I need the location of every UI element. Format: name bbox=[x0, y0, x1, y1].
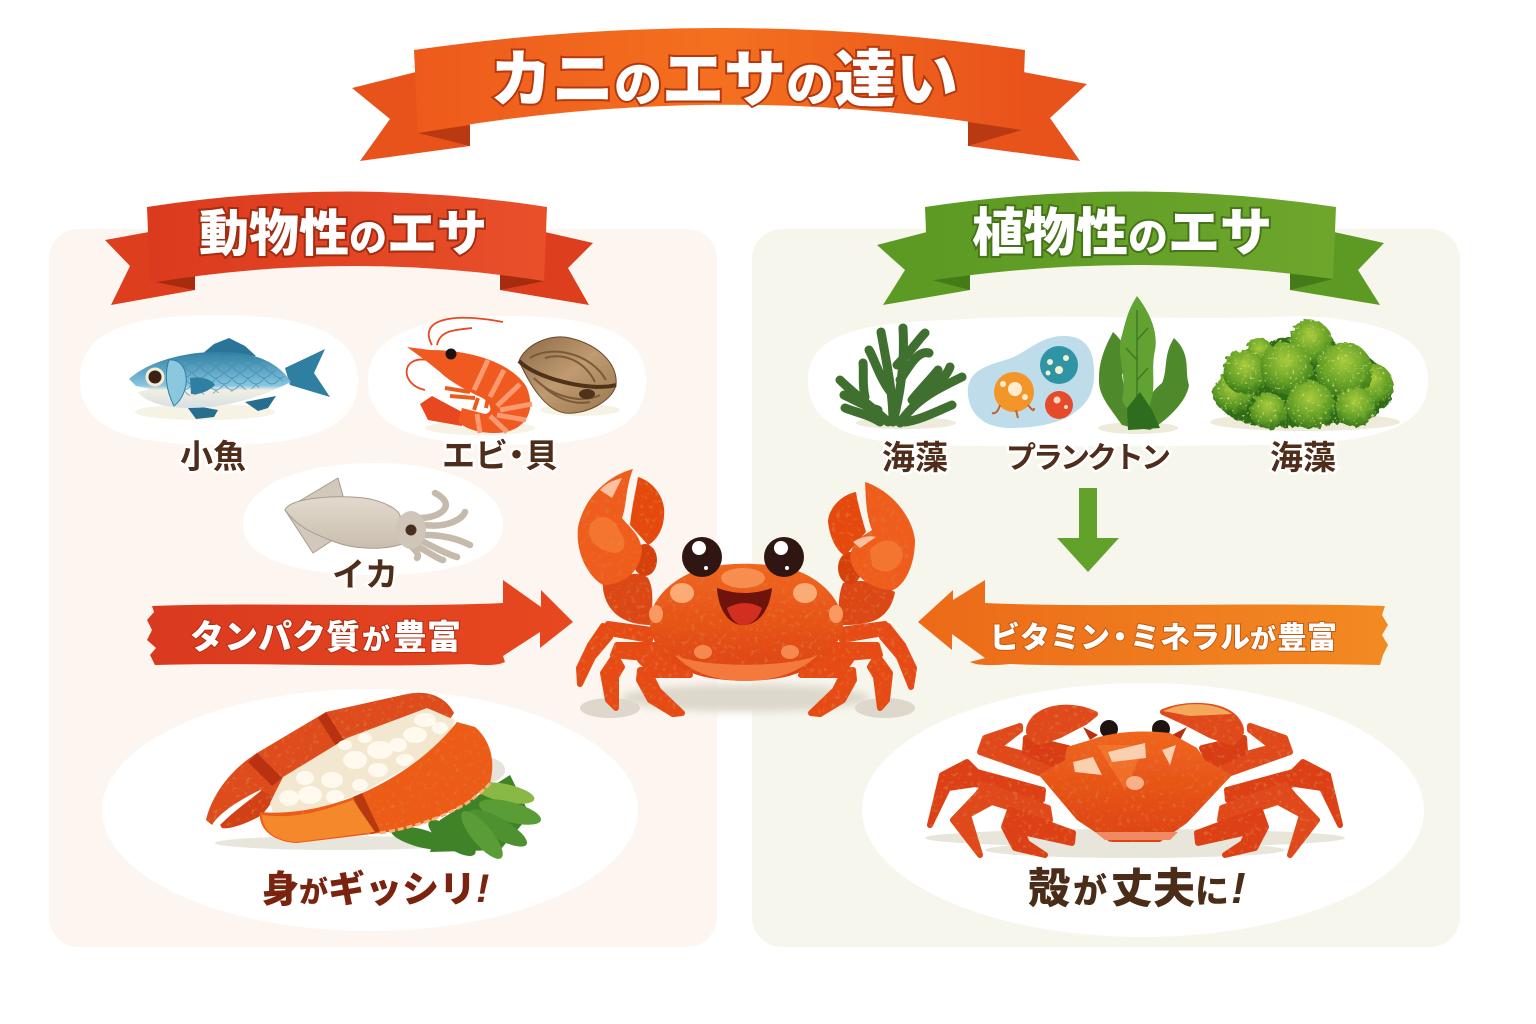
icon: shrimp bbox=[407, 318, 535, 435]
ribbon: plant feed heading bbox=[877, 192, 1384, 305]
sub: left claw bbox=[578, 469, 664, 625]
label: seaweed 2: 海藻 bbox=[1270, 439, 1336, 476]
heading text: plant: 植物性のエサ bbox=[972, 205, 1272, 263]
bubble: meaty claw result bbox=[102, 689, 638, 931]
bubble: small fish bbox=[80, 315, 358, 475]
icon: branching seaweed bbox=[840, 328, 962, 429]
icon: fish bbox=[129, 338, 330, 420]
sub: crab body bbox=[650, 564, 843, 681]
icon: strong crab bbox=[925, 704, 1345, 858]
text: vitamins and minerals rich: ビタミン・ミネラルが豊富 bbox=[990, 621, 1337, 655]
icon: squid bbox=[285, 478, 470, 560]
text: protein rich: タンパク質が豊富 bbox=[190, 619, 461, 657]
label: squid: イカ bbox=[332, 556, 398, 593]
sub: crab eyes bbox=[682, 537, 804, 577]
icon: plankton bbox=[968, 336, 1094, 428]
text: strong shell: 殻が丈夫に! bbox=[1028, 864, 1246, 913]
arrow: protein band bbox=[147, 580, 573, 665]
sub: right claw bbox=[828, 482, 915, 625]
mascot: smiling crab in center bbox=[578, 469, 915, 718]
sub: left legs bbox=[579, 624, 690, 714]
arrow: vitamin band bbox=[918, 580, 1388, 665]
icon: green seaweed clump bbox=[1210, 320, 1400, 431]
sub: right legs bbox=[801, 624, 914, 714]
bubble: shrimp and shellfish bbox=[368, 316, 646, 474]
sub: right legs and claw bbox=[1163, 706, 1340, 855]
ribbon: animal feed heading bbox=[105, 192, 593, 305]
sub: leaves bbox=[389, 775, 543, 864]
arrow: green down arrow bbox=[1057, 488, 1119, 572]
label: plankton: プランクトン bbox=[1006, 442, 1170, 475]
heading text: animal: 動物性のエサ bbox=[199, 206, 487, 262]
bubble: plant foods bbox=[808, 296, 1428, 476]
icon: kelp bbox=[1098, 296, 1189, 434]
title banner bbox=[352, 28, 1087, 161]
label: shrimp and shellfish: エビ・貝 bbox=[442, 437, 558, 474]
sub: crab smile bbox=[717, 588, 772, 625]
bubble: squid bbox=[243, 463, 503, 593]
label: seaweed 1: 海藻 bbox=[882, 439, 948, 476]
text: packed with meat: 身がギッシリ! bbox=[262, 867, 489, 911]
bubble: strong shell result bbox=[862, 683, 1424, 937]
icon: crab claw meat bbox=[206, 693, 543, 864]
sub: shell markings bbox=[589, 478, 903, 681]
panel: animal feed background bbox=[49, 229, 717, 947]
panel: plant feed background bbox=[752, 229, 1460, 947]
sub: left legs and claw bbox=[930, 708, 1095, 855]
icon: clam bbox=[519, 337, 620, 416]
label: small fish: 小魚 bbox=[180, 438, 246, 475]
title text: カニのエサの達い bbox=[490, 46, 958, 115]
